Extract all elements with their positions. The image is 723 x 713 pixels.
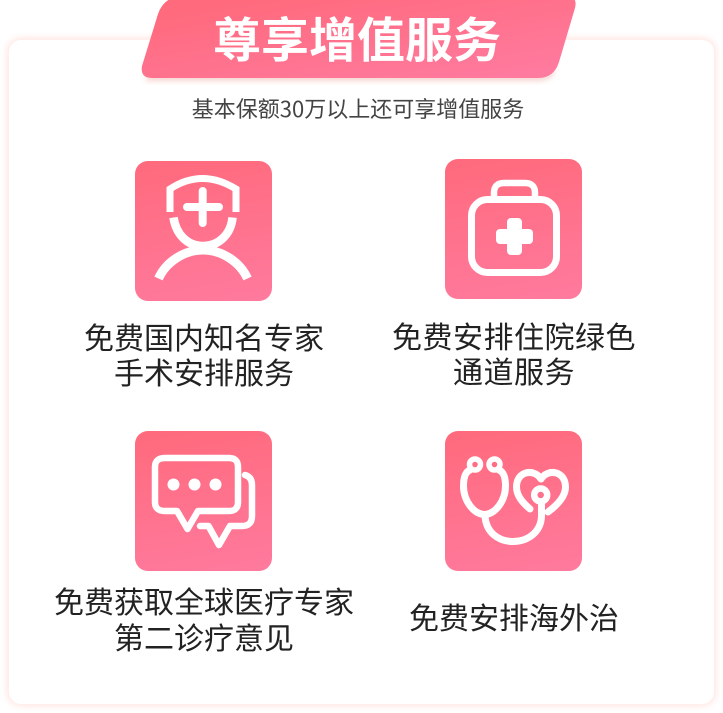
label: domestic expert surgery: 手术安排服务 (114, 358, 294, 391)
title banner (142, 0, 576, 84)
label: hospital green channel: 通道服务 (453, 357, 575, 390)
icon: medical kit (445, 159, 582, 299)
label: domestic expert surgery: 免费国内知名专家 (84, 323, 324, 356)
subtitle: 基本保额30万以上还可享增值服务 (192, 92, 524, 124)
icon: doctor (135, 161, 272, 301)
label: domestic expert surgery (84, 323, 324, 391)
label: hospital green channel (392, 322, 636, 390)
icon: chat bubbles (135, 431, 272, 571)
label: global second opinion: 第二诊疗意见 (114, 623, 294, 656)
label: global second opinion (54, 587, 354, 656)
label: hospital green channel: 免费安排住院绿色 (392, 322, 636, 355)
label: global second opinion: 免费获取全球医疗专家 (54, 587, 354, 620)
title banner: 尊享增值服务 (213, 1, 501, 71)
label: overseas treatment: 免费安排海外治 (409, 603, 619, 636)
icon: stethoscope with heart (445, 431, 582, 571)
